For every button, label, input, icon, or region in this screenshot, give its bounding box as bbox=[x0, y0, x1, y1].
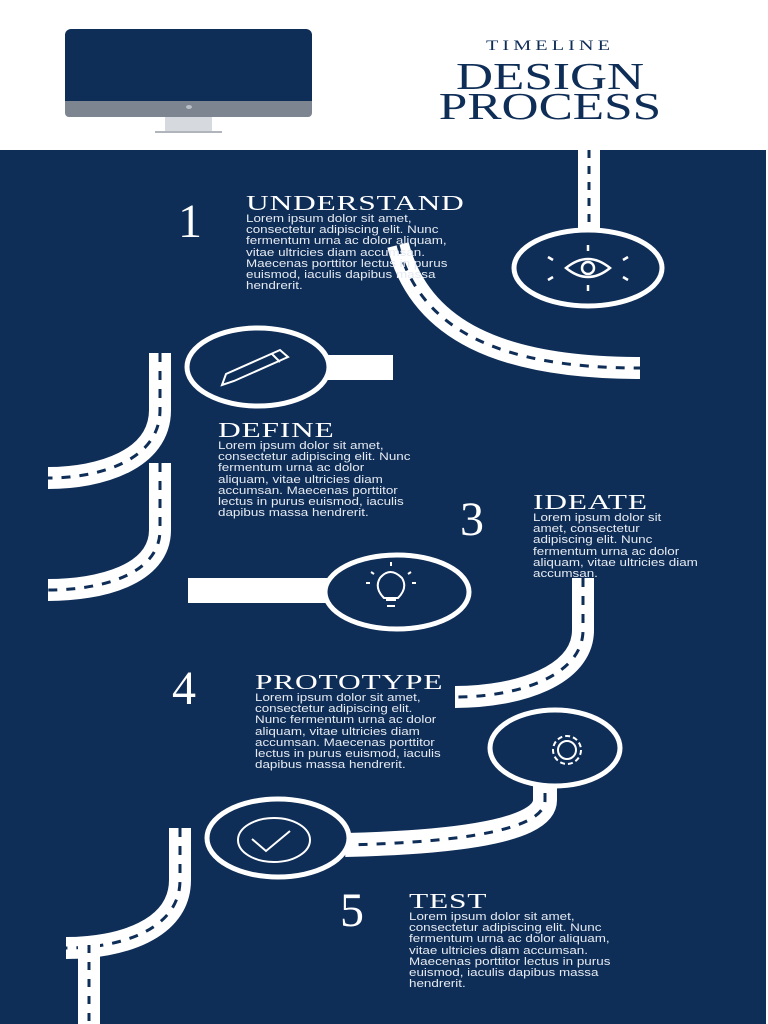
step 4 text: Lorem ipsum dolor sit amet, bbox=[255, 692, 421, 704]
step 1 number: 1 bbox=[178, 195, 202, 248]
step 2 text bbox=[218, 418, 410, 519]
step 1 text: consectetur adipiscing elit. Nunc bbox=[246, 224, 438, 236]
step 5 text: fermentum urna ac dolor aliquam, bbox=[409, 933, 610, 945]
step 1 text bbox=[246, 191, 464, 292]
icon: check bbox=[207, 799, 349, 877]
road: stub bulb bbox=[188, 578, 328, 603]
step 1 text: vitae ultricies diam accumsan. bbox=[246, 247, 425, 259]
icon: pencil bbox=[187, 328, 329, 406]
step 3 text: amet, consectetur bbox=[533, 523, 640, 535]
step 5 text: hendrerit. bbox=[409, 978, 466, 990]
step 4 text: PROTOTYPE bbox=[255, 670, 443, 694]
step 3 text: fermentum urna ac dolor bbox=[533, 546, 679, 558]
road: left 1 bbox=[48, 353, 160, 478]
step 5 text: euismod, iaculis dapibus massa bbox=[409, 967, 598, 979]
step 4 number: 4 bbox=[172, 662, 196, 715]
step 3 text: accumsan. bbox=[533, 568, 598, 580]
title bbox=[439, 38, 661, 128]
road: stub pencil bbox=[325, 355, 393, 380]
step 5 text bbox=[409, 889, 610, 990]
step 2 text: Lorem ipsum dolor sit amet, bbox=[218, 440, 384, 452]
step 4 text: accumsan. Maecenas porttitor bbox=[255, 737, 435, 749]
step 3 text: IDEATE bbox=[533, 490, 648, 514]
step 4 text: dapibus massa hendrerit. bbox=[255, 759, 406, 771]
icon: gear bbox=[490, 710, 620, 786]
step 1 text: Maecenas porttitor lectus in purus bbox=[246, 258, 447, 270]
step 4 text: aliquam, vitae ultricies diam bbox=[255, 726, 420, 738]
step 1 text: UNDERSTAND bbox=[246, 191, 464, 215]
step 2 text: consectetur adipiscing elit. Nunc bbox=[218, 451, 410, 463]
step 2 text: DEFINE bbox=[218, 418, 335, 442]
step 5 text: consectetur adipiscing elit. Nunc bbox=[409, 922, 601, 934]
step 3 text bbox=[533, 490, 698, 580]
step 3 text: Lorem ipsum dolor sit bbox=[533, 512, 661, 524]
step 2 text: aliquam, vitae ultricies diam bbox=[218, 474, 383, 486]
step 2 text: lectus in purus euismod, iaculis bbox=[218, 496, 404, 508]
icon: bulb bbox=[325, 555, 469, 629]
step 1 text: fermentum urna ac dolor aliquam, bbox=[246, 235, 447, 247]
step 5 text: Lorem ipsum dolor sit amet, bbox=[409, 911, 575, 923]
step 3 text: aliquam, vitae ultricies diam bbox=[533, 557, 698, 569]
step 4 text: Nunc fermentum urna ac dolor bbox=[255, 714, 436, 726]
step 1 text: Lorem ipsum dolor sit amet, bbox=[246, 213, 412, 225]
step 3 text: adipiscing elit. Nunc bbox=[533, 534, 652, 546]
step 1 text: hendrerit. bbox=[246, 280, 303, 292]
step 5 text: TEST bbox=[409, 889, 487, 913]
icon: eye bbox=[514, 230, 662, 306]
road: top bbox=[578, 150, 600, 232]
title: TIMELINE bbox=[486, 38, 614, 54]
road: bottom left bbox=[66, 828, 180, 948]
road: ideate bbox=[455, 578, 583, 697]
step 3 number: 3 bbox=[460, 493, 484, 546]
step 2 text: dapibus massa hendrerit. bbox=[218, 507, 369, 519]
road: curve 1 bbox=[398, 245, 640, 368]
road: left 2 bbox=[48, 463, 160, 590]
step 4 text: lectus in purus euismod, iaculis bbox=[255, 748, 441, 760]
step 2 text: fermentum urna ac dolor bbox=[218, 462, 364, 474]
step 5 text: Maecenas porttitor lectus in purus bbox=[409, 956, 610, 968]
title: DESIGN bbox=[456, 56, 644, 98]
step 4 text bbox=[255, 670, 443, 771]
step 4 text: consectetur adipiscing elit. bbox=[255, 703, 412, 715]
step 5 text: vitae ultricies diam accumsan. bbox=[409, 945, 588, 957]
icon: monitor bbox=[65, 29, 312, 133]
road: gear to check bbox=[345, 775, 545, 845]
title: PROCESS bbox=[439, 86, 661, 128]
step 5 number: 5 bbox=[340, 884, 364, 937]
step 1 text: euismod, iaculis dapibus massa bbox=[246, 269, 435, 281]
step 2 text: accumsan. Maecenas porttitor bbox=[218, 485, 398, 497]
